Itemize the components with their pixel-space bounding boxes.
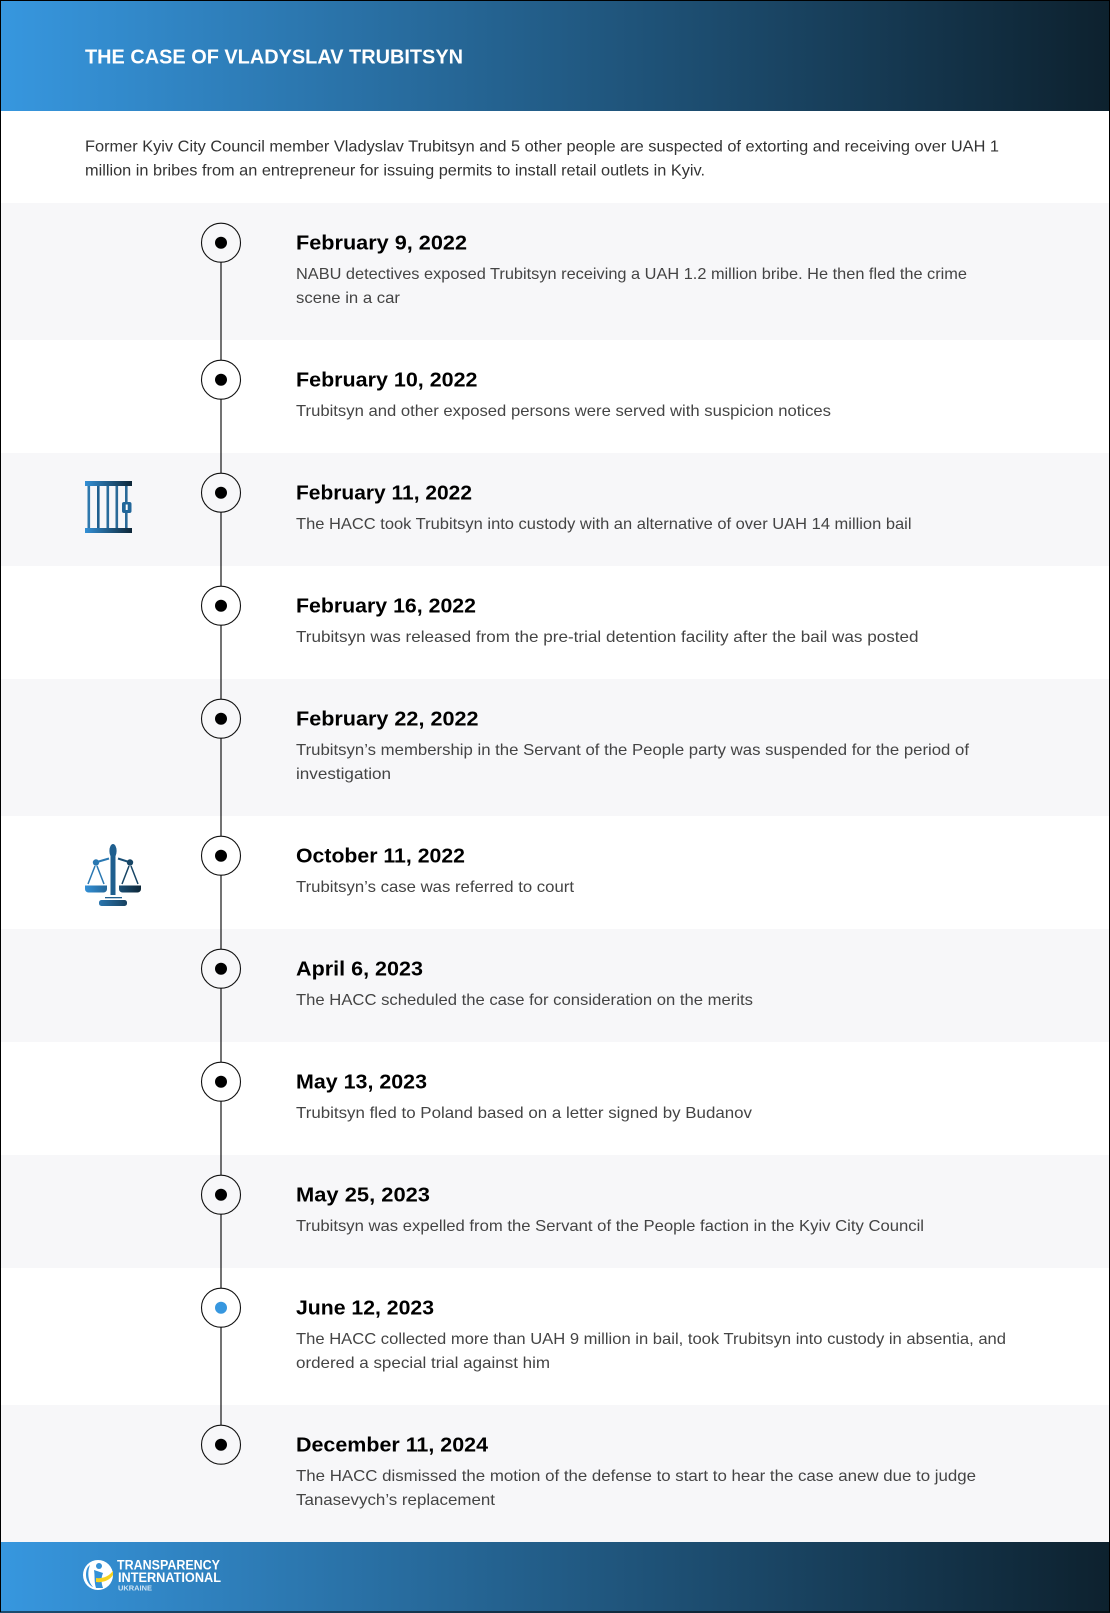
icon: scales of justice — [85, 844, 141, 906]
row: June 12, 2023: ordered a special trial against him — [296, 1355, 550, 1372]
row: May 25, 2023 — [202, 1175, 924, 1235]
row: February 11, 2022: The HACC took Trubitsyn into custody with an alternative of over UAH 14 million bail — [296, 516, 912, 533]
row: October 11, 2022: October 11, 2022 — [296, 845, 465, 868]
row: December 11, 2024: The HACC dismissed the motion of the defense to start to hear the case anew due to judge — [296, 1468, 976, 1485]
logo: Transparency International Ukraine — [83, 1558, 221, 1592]
intro text: million in bribes from an entrepreneur for issuing permits to install retail outlets in Kyiv. — [85, 162, 705, 180]
row: May 13, 2023 — [202, 1062, 752, 1122]
row: February 22, 2022: February 22, 2022 — [296, 708, 478, 731]
title: THE CASE OF VLADYSLAV TRUBITSYN — [85, 46, 463, 68]
row: February 22, 2022: investigation — [296, 766, 391, 783]
row: February 9, 2022: February 9, 2022 — [296, 232, 467, 255]
footer banner — [0, 1542, 1110, 1613]
row: April 6, 2023 — [202, 949, 753, 1009]
row: May 25, 2023: Trubitsyn was expelled from the Servant of the People faction in the Kyiv City Council — [296, 1218, 924, 1235]
row: October 11, 2022 — [202, 836, 575, 896]
row: February 22, 2022 — [202, 699, 970, 783]
row: February 9, 2022 — [202, 223, 967, 307]
row: February 9, 2022: NABU detectives exposed Trubitsyn receiving a UAH 1.2 million bribe. He then fled the crime — [296, 266, 967, 283]
row: December 11, 2024: Tanasevych’s replacement — [296, 1492, 496, 1509]
logo: Transparency International Ukraine: TRANSPARENCY — [117, 1558, 220, 1572]
row: February 10, 2022: February 10, 2022 — [296, 369, 478, 392]
row: June 12, 2023: June 12, 2023 — [296, 1297, 434, 1320]
row: May 25, 2023: May 25, 2023 — [296, 1184, 430, 1207]
intro text: Former Kyiv City Council member Vladyslav Trubitsyn and 5 other people are suspected of extorting and receiving over UAH 1 — [85, 138, 999, 156]
row: June 12, 2023 — [202, 1288, 1006, 1372]
row: June 12, 2023: The HACC collected more than UAH 9 million in bail, took Trubitsyn into custody in absentia, and — [296, 1331, 1006, 1348]
row: May 13, 2023: May 13, 2023 — [296, 1071, 427, 1094]
logo: Transparency International Ukraine: INTERNATIONAL — [118, 1570, 221, 1585]
row: February 16, 2022 — [202, 586, 918, 646]
timeline line — [220, 243, 222, 1445]
row: May 13, 2023: Trubitsyn fled to Poland based on a letter signed by Budanov — [296, 1105, 752, 1122]
row: February 9, 2022: scene in a car — [296, 290, 401, 307]
row: December 11, 2024 — [202, 1425, 976, 1509]
row: February 16, 2022: February 16, 2022 — [296, 595, 476, 618]
icon: jail bars — [85, 481, 132, 533]
logo: Transparency International Ukraine: UKRAINE — [118, 1584, 152, 1592]
row: December 11, 2024: December 11, 2024 — [296, 1434, 489, 1457]
row: February 11, 2022 — [202, 473, 912, 533]
row: April 6, 2023: April 6, 2023 — [296, 958, 423, 981]
header banner — [0, 0, 1110, 111]
intro text — [85, 138, 999, 180]
row: February 11, 2022: February 11, 2022 — [296, 482, 472, 505]
row: February 10, 2022: Trubitsyn and other exposed persons were served with suspicion notices — [296, 403, 831, 420]
row: February 22, 2022: Trubitsyn’s membership in the Servant of the People party was suspended for the period of — [296, 742, 970, 759]
row: October 11, 2022: Trubitsyn’s case was referred to court — [296, 879, 575, 896]
row: April 6, 2023: The HACC scheduled the case for consideration on the merits — [296, 992, 753, 1009]
row: February 10, 2022 — [202, 360, 831, 420]
row: February 16, 2022: Trubitsyn was released from the pre-trial detention facility after the bail was posted — [296, 629, 918, 646]
